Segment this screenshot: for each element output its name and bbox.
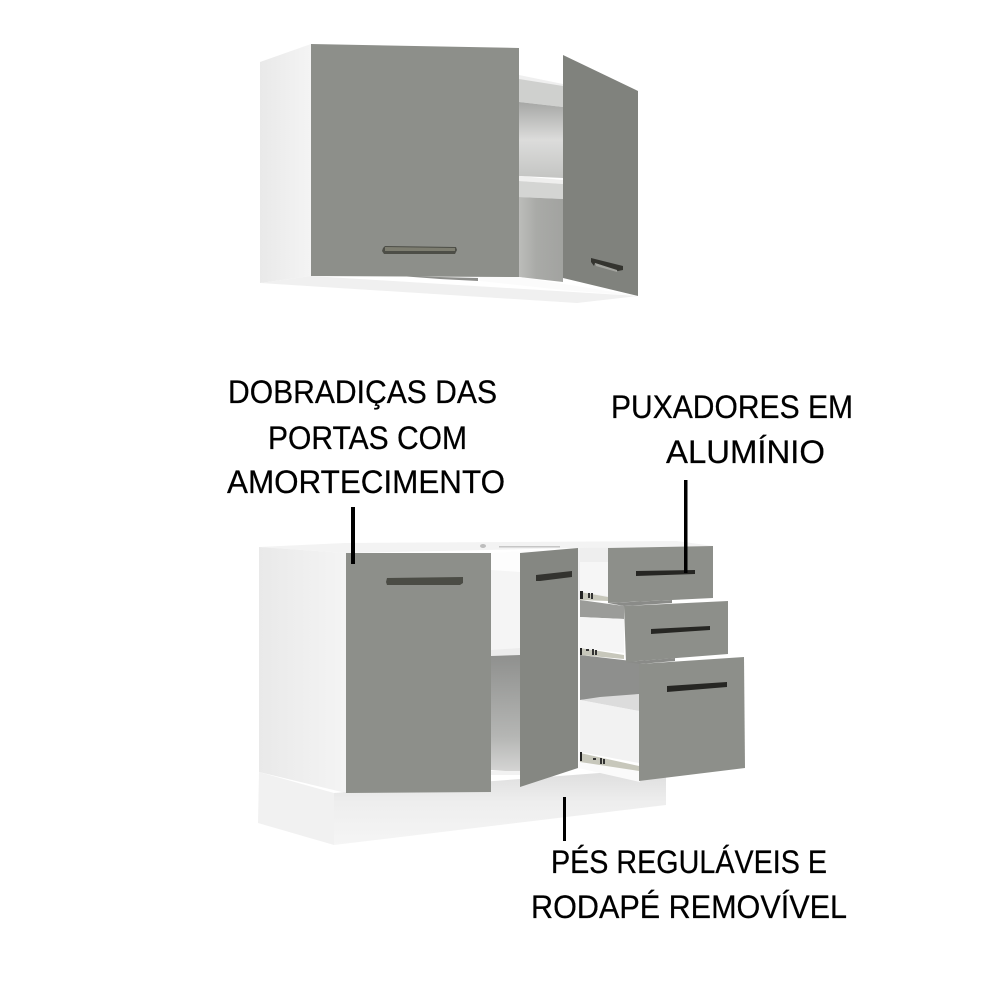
countertop surface [259,541,713,553]
removable plinth [258,768,666,845]
drawer bays and boxes [578,600,640,782]
handles label [611,389,853,470]
hinges label [227,374,505,500]
middle drawer front [624,601,728,664]
feet label: PÉS REGULÁVEIS E [551,844,827,880]
base side panel [259,547,346,793]
handles label: PUXADORES EM [611,389,853,425]
hinges leader line [351,507,355,564]
drawer slides [580,591,639,771]
hinges label: PORTAS COM [268,420,467,456]
feet label [531,844,847,925]
left door [311,44,519,277]
cabinet interior [400,75,638,296]
countertop detail [480,544,560,548]
cabinet bottom panel [260,276,638,303]
left door handle [386,577,463,585]
lower base cabinet [258,541,745,845]
handles leader line [684,480,688,573]
middle open door [520,548,578,787]
callout: handles [611,389,853,573]
callout: hinges [227,374,505,564]
cabinet side panel [260,44,311,283]
top drawer handle [636,570,695,576]
upper wall cabinet [260,44,638,303]
feet label: RODAPÉ REMOVÍVEL [531,889,847,925]
right door [563,55,638,296]
handles label: ALUMÍNIO [666,434,825,470]
middle drawer handle [651,626,710,634]
left door handle [382,246,457,254]
left door [346,553,491,793]
top drawer front [608,546,713,606]
feet leader line [563,797,566,841]
base interior [491,547,680,775]
bottom drawer front [639,657,745,781]
middle door handle [536,571,572,581]
bottom drawer handle [667,682,727,692]
hinges label: AMORTECIMENTO [227,464,505,500]
hinges label: DOBRADIÇAS DAS [228,374,497,410]
callout: feet and plinth [531,797,847,925]
right door handle [591,258,623,272]
